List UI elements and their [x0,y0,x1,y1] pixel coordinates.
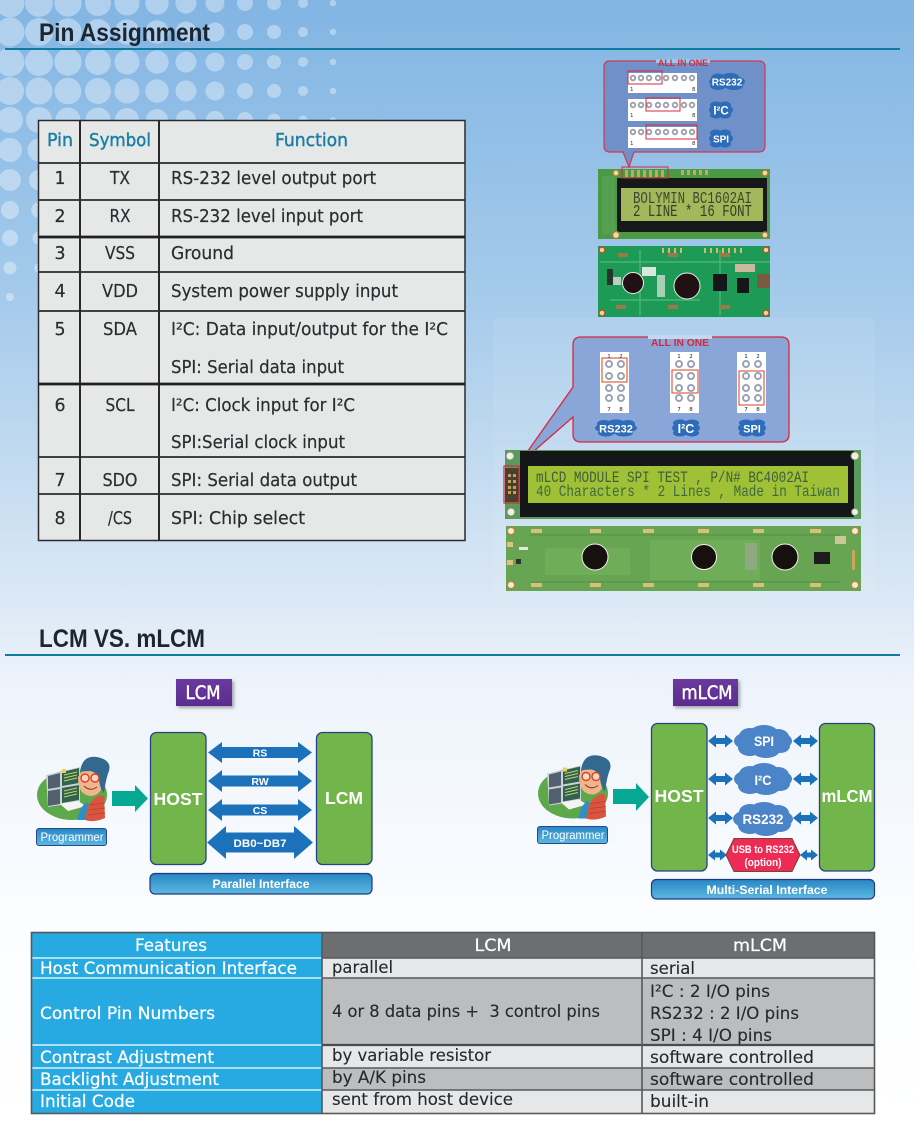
pin rows: RS-232 level output port [171,169,376,189]
block: HOST: HOST [154,789,203,809]
arrow: RS: RS [253,748,267,760]
mLCM values: SPI : 4 I/O pins [650,1026,772,1046]
callout: 40x2 all in one pin selection: 2 [756,354,760,360]
callout: 16x2 all in one pin selection: RS232 [712,78,743,88]
bar: Multi-Serial Interface [652,880,874,899]
cloud: I2C: I²C [754,772,772,788]
pin rows: System power supply input [171,282,398,302]
callout: 16x2 all in one pin selection: 1 [630,87,634,93]
cloud: RS232: RS232 [742,812,784,827]
LCM values: 4 or 8 data pins + 3 control pins [332,1002,600,1022]
LCD module back: BC1602AI PCB [598,246,770,317]
cloud: I2C [734,763,792,795]
LCD module back: BC4002AI PCB [506,526,861,591]
label: LCM: LCM [186,683,220,704]
pin rows: 3 [54,244,66,264]
LCM values [332,958,600,1110]
callout: 40x2 all in one pin selection: 7 [677,407,681,413]
callout: 16x2 all in one pin selection: 1 [630,113,634,119]
callout: 40x2 all in one pin selection: SPI [743,424,761,436]
arrows: interface to mLCM [793,734,818,860]
callout: 40x2 all in one pin selection: 2 [619,354,623,360]
pin rows: SDA [103,320,137,340]
arrow: programmer to host [613,783,649,811]
cloud labels [709,73,745,148]
callout: 40x2 all in one pin selection: 8 [619,407,623,413]
callout: 16x2 all in one pin selection [604,58,765,167]
mLCM values: I²C : 2 I/O pins [650,982,770,1002]
pin rows: SDO [102,471,138,491]
LCD module front: BC1602AI: BOLYMIN BC1602AI [633,189,752,208]
LCM values: sent from host device [332,1090,513,1110]
cloud labels [595,420,766,436]
callout: 16x2 all in one pin selection: 8 [692,141,696,147]
pin rows: TX [109,169,130,189]
callout: 16x2 all in one pin selection: SPI [713,134,729,146]
pin rows: I²C: Clock input for I²C [171,396,355,416]
arrow: DB0~DB7: DB0~DB7 [234,838,286,850]
heading: Pin Assignment: Pin Assignment [39,19,211,47]
pin rows: VDD [102,282,138,302]
pin rows: 6 [54,396,66,416]
LCD module front: BC4002AI: 40 Characters * 2 Lines , Made in Taiwan [536,483,840,501]
heading: LCM VS. mLCM: LCM VS. mLCM [39,625,205,653]
pin rows: SPI: Serial data input [171,358,344,378]
pin rows: RX [110,207,131,227]
table header: Function [275,130,348,151]
label: Programmer: Programmer [542,828,604,842]
callout: 40x2 all in one pin selection: 8 [756,407,760,413]
diagram: mLCM multi-serial interface [538,679,874,899]
arrow: RS [208,742,312,763]
callout: 40x2 all in one pin selection: 1 [744,354,748,360]
cloud: RS232 [733,802,793,836]
callout: 40x2 all in one pin selection: 7 [607,407,611,413]
mLCM values: software controlled [650,1048,814,1068]
block: LCM: LCM [325,788,363,808]
callout: 40x2 all in one pin selection: RS232 [599,424,633,436]
pin rows: 7 [54,471,66,491]
pin rows: 8 [54,509,66,529]
pin rows: 1 [54,169,66,189]
pin rows: 4 [54,282,66,302]
hexagon: USB to RS232 option [726,838,800,872]
pin rows: SCL [106,396,135,416]
LCM values: by variable resistor [332,1046,491,1066]
label: LCM [176,679,232,706]
feature names: Contrast Adjustment [40,1048,214,1068]
callout: 40x2 all in one pin selection: 1 [677,354,681,360]
panel: pin assignment table [38,120,465,541]
bar: Parallel Interface: Parallel Interface [212,879,310,891]
block: mLCM: mLCM [822,786,872,806]
feature names: Initial Code [40,1092,135,1112]
callout: 40x2 all in one pin selection: 1 [607,354,611,360]
callout: 40x2 all in one pin selection: 2 [689,354,693,360]
cloud: SPI [734,725,792,758]
pin rows: VSS [105,244,135,264]
pin rows: Ground [171,244,234,264]
pin rows: SPI: Serial data output [171,471,357,491]
feature names [40,959,297,1112]
LCD module front: BC1602AI [598,167,770,239]
faint backing panel [493,318,875,596]
LCD module front: BC1602AI: 2 LINE * 16 FONT [633,202,752,221]
block: HOST [150,732,206,864]
diagram: LCM parallel interface [36,679,372,894]
feature names: Host Communication Interface [40,959,297,979]
panel: comparison table [31,932,875,1114]
table header: Symbol [89,130,151,151]
feature names: Backlight Adjustment [40,1070,219,1090]
arrows: host to interface [708,734,733,860]
pin rows: 2 [54,207,66,227]
callout: 40x2 all in one pin selection: 8 [689,407,693,413]
LCM values: by A/K pins [332,1068,426,1088]
block: HOST: HOST [654,786,704,806]
arrow: programmer to host [112,785,148,812]
LCD module front: BC4002AI [504,450,861,519]
LCM values: parallel [332,958,393,978]
table header [47,130,348,151]
arrow: CS: CS [253,805,267,817]
mLCM values: serial [650,959,695,979]
block: LCM [316,732,372,864]
arrow: RW: RW [251,776,269,788]
feature names: Control Pin Numbers [40,1004,215,1024]
mLCM values: built-in [650,1092,709,1112]
callout: 16x2 all in one pin selection: 8 [692,113,696,119]
icon: programmer [538,755,610,820]
callout: 40x2 all in one pin selection: ALL IN ONE [651,337,709,349]
callout: 40x2 all in one pin selection: I²C [678,422,694,436]
hexagon: USB to RS232 option: (option) [744,857,782,869]
icon: programmer [37,757,110,821]
table header: Pin [47,130,73,151]
hexagon: USB to RS232 option: USB to RS232 [732,844,794,856]
callout: 16x2 all in one pin selection: ALL IN ONE [658,58,708,68]
callout: 16x2 all in one pin selection: I²C [713,106,729,118]
pin rows: /CS [108,509,132,529]
label: Programmer: Programmer [40,830,104,844]
cloud: SPI: SPI [754,734,774,749]
mLCM values [650,959,814,1112]
mLCM values: software controlled [650,1070,814,1090]
callout: 40x2 all in one pin selection [518,335,789,465]
bar: Multi-Serial Interface: Multi-Serial Interface [706,885,828,897]
callout: 40x2 all in one pin selection: 7 [744,407,748,413]
LCD module front: BC4002AI: mLCD MODULE SPI TEST , P/N# BC4002AI [536,469,809,487]
pin rows: SPI:Serial clock input [171,433,345,453]
table header row: LCM [474,936,512,956]
block: HOST [652,724,707,871]
pin rows: I²C: Data input/output for the I²C [171,320,448,340]
label: mLCM: mLCM [682,683,732,704]
mLCM values: RS232 : 2 I/O pins [650,1004,799,1024]
arrow: DB0~DB7 [207,826,313,859]
arrow: CS [208,799,312,821]
table header row: mLCM [733,936,787,956]
pin rows: SPI: Chip select [171,509,305,529]
label: mLCM [673,679,738,706]
pin rows: 5 [54,320,66,340]
halftone dot pattern [0,0,336,301]
callout: 16x2 all in one pin selection: 1 [630,141,634,147]
arrow: RW [208,770,312,792]
table header row [135,936,787,956]
bar: Parallel Interface [150,874,372,894]
callout: 16x2 all in one pin selection: 8 [692,87,696,93]
pin rows [54,169,448,529]
block: mLCM [820,724,874,871]
pin rows: RS-232 level input port [171,207,363,227]
table header row: Features [135,936,207,956]
